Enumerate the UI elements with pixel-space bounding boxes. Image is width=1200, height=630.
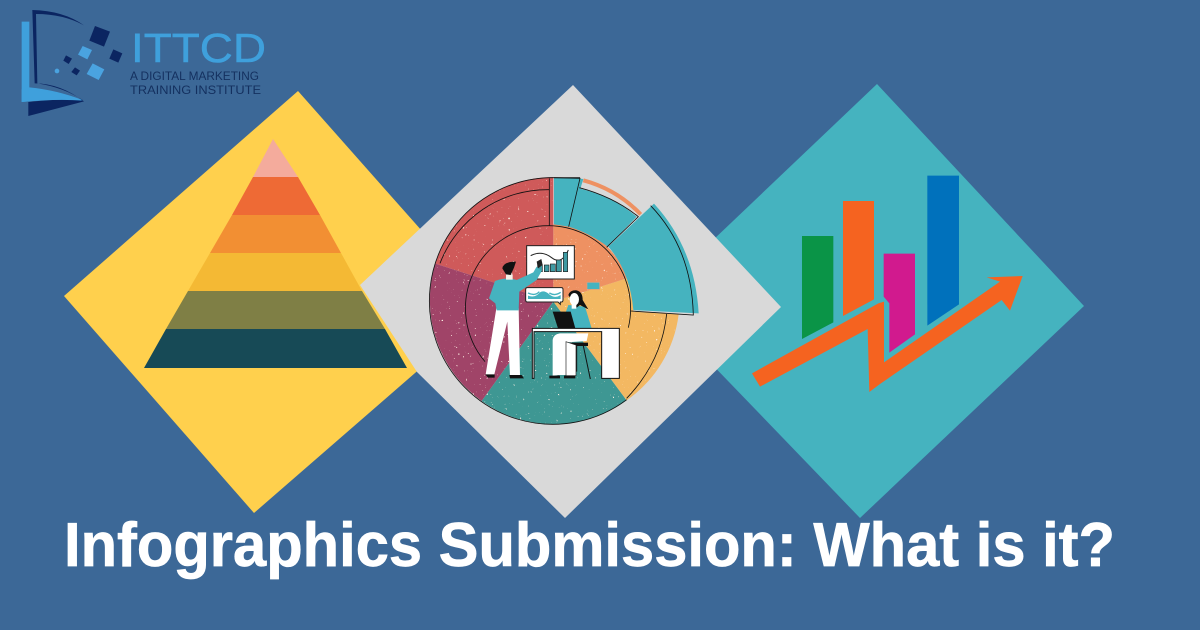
man presenting [485,259,543,378]
logo tagline line 1: A DIGITAL MARKETING [130,71,259,83]
icon: book and pixel squares [22,10,122,116]
woman at laptop [560,290,592,328]
logo: ITTCD [22,10,266,116]
bar: blue [927,176,959,326]
desk and chair [532,312,619,379]
wedge: yellow [553,278,679,400]
bar chart with rising arrow [752,176,1023,392]
bar: green [802,236,833,339]
orange outer stripe [583,180,641,214]
black ring outlines [429,178,693,424]
wedge: red [435,177,553,302]
bar: magenta [884,254,915,353]
panel: yellow diamond [64,91,430,513]
speech bubble with wave chart [526,288,563,304]
wedge: teal [482,302,627,424]
panel: gray diamond [360,85,781,518]
title: Infographics Submission: What is it? [64,511,1115,580]
pyramid layer 6 [144,329,407,368]
board with bar chart [527,246,574,279]
radial chart with two people [427,175,699,428]
pyramid layer 4 [188,253,362,291]
pyramid layer 1 [253,139,298,177]
speckle texture [427,175,683,428]
bar: orange [843,201,874,316]
logo tagline line 2: TRAINING INSTITUTE [130,85,261,97]
small tag [587,282,600,289]
panel: teal diamond [650,84,1084,518]
teal sector 3 [608,204,699,313]
logo wordmark: ITTCD [131,25,266,71]
pyramid layer 2 [232,177,320,215]
teal sector 1 [554,177,583,227]
pyramid layer 3 [210,215,341,253]
pyramid chart [144,139,407,368]
wedge: purple [430,264,553,401]
arrow: rising zigzag [752,276,1023,392]
pyramid layer 5 [166,291,385,329]
teal sector 2 [569,188,637,247]
wedge: orange [553,224,627,302]
